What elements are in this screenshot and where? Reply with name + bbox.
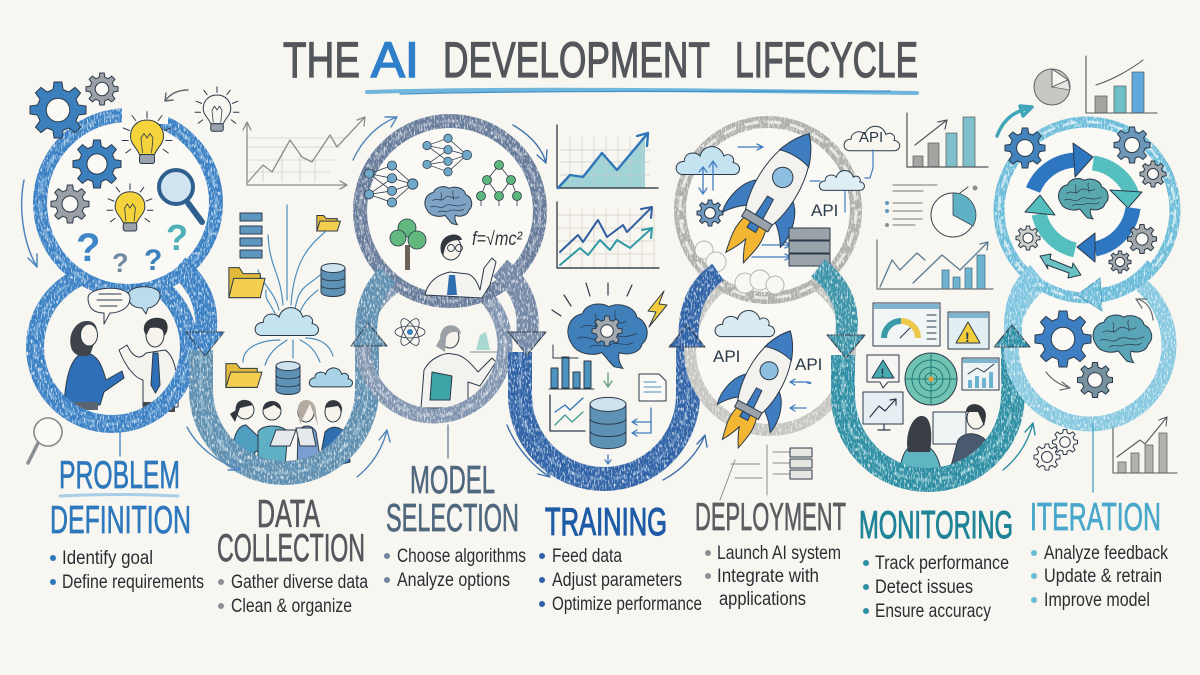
U-shaped ring: [520, 345, 688, 479]
upper ring: [40, 105, 216, 291]
title: LIFECYCLE: [735, 32, 918, 88]
U-shaped ring: [201, 340, 367, 473]
panel: data collection: [187, 117, 397, 617]
icon: folder lower: [226, 364, 262, 387]
icon: large blue gear: [30, 82, 86, 138]
icon: tree: [390, 219, 426, 270]
connector: [1092, 424, 1094, 492]
label: API: API: [811, 201, 838, 220]
icons: question marks: ?: [112, 248, 128, 278]
chart: line area chart: [557, 125, 658, 188]
arrow: data to model: [351, 275, 388, 346]
panel: model selection: [360, 121, 540, 591]
upper ring: [999, 122, 1175, 298]
heading: model selection: SELECTION: [386, 497, 519, 540]
icon: second yellow bulb: [107, 184, 153, 231]
heading: model selection: [386, 459, 519, 540]
arrows: small curved: [1046, 299, 1153, 390]
icon: database lower: [276, 362, 300, 394]
lower ring: [1011, 266, 1169, 424]
arrow: left curved: [22, 180, 37, 267]
chart: list and pie: [885, 185, 978, 237]
icon: brain lower: [1093, 315, 1152, 363]
arrows: up/down from cloud: [699, 144, 791, 260]
icon: gear lower small: [1078, 362, 1112, 398]
arrow: model to training: [500, 268, 546, 355]
bullets: problem definition: Define requirements: [62, 572, 204, 593]
icon: bar chart: [549, 345, 594, 389]
icon: mini chart window: [962, 358, 999, 390]
U-shaped ring: [843, 345, 1013, 480]
formula: f=√mc²: [472, 229, 523, 250]
heading: problem definition: [50, 454, 191, 542]
icon: faded light bulb: [195, 87, 239, 131]
lower ring: [363, 274, 505, 416]
arrow: training to deployment: [669, 272, 718, 347]
illustration: analysts at screens: [900, 404, 990, 470]
bullets: iteration: Analyze feedback: [1044, 543, 1168, 564]
bullets: training: Feed data: [552, 546, 622, 567]
heading: training: TRAINING: [545, 501, 667, 544]
icon: API cloud: API: [859, 129, 883, 146]
panel: problem definition: [22, 73, 239, 593]
icon: line chart small: [550, 395, 585, 431]
upper ring: [360, 121, 540, 301]
panel: monitoring: [843, 303, 1035, 622]
icon: API cloud: [844, 126, 900, 151]
heading: problem definition: PROBLEM: [59, 454, 180, 497]
connector: [447, 425, 449, 458]
label: API left: API: [713, 347, 740, 366]
icon: folder top: [317, 216, 340, 231]
icon: magnifier: [159, 170, 202, 222]
bullets: data collection: Gather diverse data: [231, 572, 368, 593]
icons: question marks: ?: [76, 226, 100, 270]
lower ring: [35, 270, 189, 424]
icon: decision tree: [476, 160, 522, 206]
panel: training: [507, 125, 707, 615]
bullets: training: Optimize performance: [552, 594, 702, 615]
bullets: training: [539, 546, 702, 615]
heading: data collection: DATA: [257, 493, 320, 536]
icon: yellow bulb: [122, 112, 172, 164]
icon: brain teal: [1059, 179, 1108, 219]
icon: folder left: [229, 268, 265, 298]
icon: radar: [905, 353, 957, 405]
icon: small cloud with connector: [810, 150, 873, 212]
bullets: deployment: Integrate with: [717, 566, 819, 587]
icon: exhaust clouds: [695, 241, 784, 294]
bullets: iteration: Improve model: [1044, 590, 1150, 611]
icon: document: [639, 374, 666, 401]
icons: question marks: [76, 217, 188, 278]
heading: model selection: MODEL: [410, 459, 495, 502]
bullets: deployment: [705, 543, 841, 610]
bullets: deployment: applications: [719, 589, 806, 610]
icon: gear: [697, 200, 723, 226]
icon: warning window: !: [965, 329, 970, 345]
connector: [119, 432, 121, 456]
bullets: problem definition: Identify goal: [62, 548, 153, 569]
arrow: two-way: [1040, 254, 1081, 278]
tree of data lines: [243, 205, 333, 365]
bullets: monitoring: Track performance: [875, 553, 1009, 574]
icon: brain with gear: [552, 283, 647, 368]
arrow: curved: [1003, 423, 1035, 470]
cycle arrows around brain: [1025, 143, 1142, 262]
chart: mixed line and bars: [877, 240, 993, 289]
icon: blue gear: [73, 140, 121, 188]
title: THE: [283, 32, 360, 88]
title: AI: [371, 32, 419, 88]
bullets: model selection: Choose algorithms: [397, 546, 526, 567]
arrows: data flow: [604, 373, 651, 464]
chart: bottom right bars: [1113, 417, 1177, 473]
icons: question marks: ?: [166, 217, 188, 258]
arrows: to rocket: [790, 379, 811, 411]
icon: gauge dashboard: [873, 303, 940, 346]
illustration: scientist in lab coat: [395, 316, 498, 408]
icon: server: [789, 228, 830, 266]
lower ring: [690, 270, 850, 430]
panel: deployment: [676, 116, 900, 610]
bullets: problem definition: [50, 548, 204, 593]
icon: large gear lower: [1035, 311, 1091, 367]
icon: server stack: [240, 213, 262, 258]
bullets: monitoring: Detect issues: [875, 577, 973, 598]
icon: neural network left: [364, 161, 418, 207]
illustration: two colleagues talking: [64, 318, 178, 412]
icon: database: [590, 397, 626, 449]
bullets: training: Adjust parameters: [552, 570, 682, 591]
heading: data collection: [217, 493, 365, 570]
upper ring: [680, 122, 856, 298]
icon: small cloud: [309, 368, 352, 387]
icons: sketched gears: [1034, 430, 1078, 470]
icon: alert bubble: [867, 355, 899, 388]
icon: warning window: [948, 312, 989, 349]
icon: cloud: [676, 147, 740, 175]
bullets: monitoring: [863, 553, 1009, 622]
illustration: team with laptops: [230, 400, 350, 470]
icons: gears around cycle: [1005, 127, 1166, 273]
arrows: curved: [187, 117, 397, 477]
chart: top right bars: [1086, 56, 1157, 113]
icon: large rocket: [704, 116, 839, 276]
icon: speech bubbles: [88, 287, 160, 324]
arrow: problem to data: [178, 266, 224, 356]
icon: central cloud: [255, 308, 319, 336]
icon: sketched magnifier: [28, 418, 62, 463]
icon: network rack: [720, 445, 790, 500]
icon: database top: [321, 264, 345, 296]
arrow: teal top: [997, 106, 1032, 136]
heading: data collection: COLLECTION: [217, 527, 365, 570]
bullets: data collection: [218, 572, 368, 617]
bullets: iteration: Update & retrain: [1044, 566, 1162, 587]
arrows: curved: [507, 125, 707, 480]
bullets: model selection: [384, 546, 526, 591]
chart: pie: [1034, 69, 1070, 105]
icon: monitor: [863, 392, 903, 430]
icon: small server: [790, 448, 812, 479]
icon: small gray gear: [86, 73, 118, 105]
arrow: monitoring to iteration: [994, 272, 1036, 347]
title: [283, 32, 918, 94]
bullets: monitoring: Ensure accuracy: [875, 601, 991, 622]
label: API right: API: [795, 355, 822, 374]
chart: dual line chart: [557, 202, 659, 268]
icon: neural network: [423, 134, 472, 176]
icon: brain: [425, 187, 472, 225]
icon: gray gear: [51, 185, 89, 223]
icon: lower rocket: [703, 316, 818, 458]
chart: gray sketched line chart: [243, 117, 365, 189]
icons: question marks: ?: [144, 244, 162, 277]
heading: problem definition: DEFINITION: [50, 499, 191, 542]
icon: alert bubble: !: [880, 366, 884, 380]
bullets: data collection: Clean & organize: [231, 596, 352, 617]
title: DEVELOPMENT: [443, 32, 710, 88]
arrow: deployment to monitoring: [818, 268, 865, 358]
bullets: iteration: [1031, 543, 1168, 611]
icon: cloud lower: [715, 310, 775, 337]
illustration: scientist with equation: [425, 235, 496, 298]
arrow: iteration feedback: [1077, 264, 1152, 311]
heading: deployment: DEPLOYMENT: [695, 496, 846, 539]
heading: monitoring: MONITORING: [859, 504, 1013, 547]
chart: growth bars: [907, 113, 988, 167]
bullets: model selection: Analyze options: [397, 570, 510, 591]
panel: iteration: [997, 56, 1177, 611]
icon: lightning: [648, 291, 667, 327]
arrow: idea to gears: [165, 90, 188, 101]
bullets: deployment: Launch AI system: [717, 543, 841, 564]
